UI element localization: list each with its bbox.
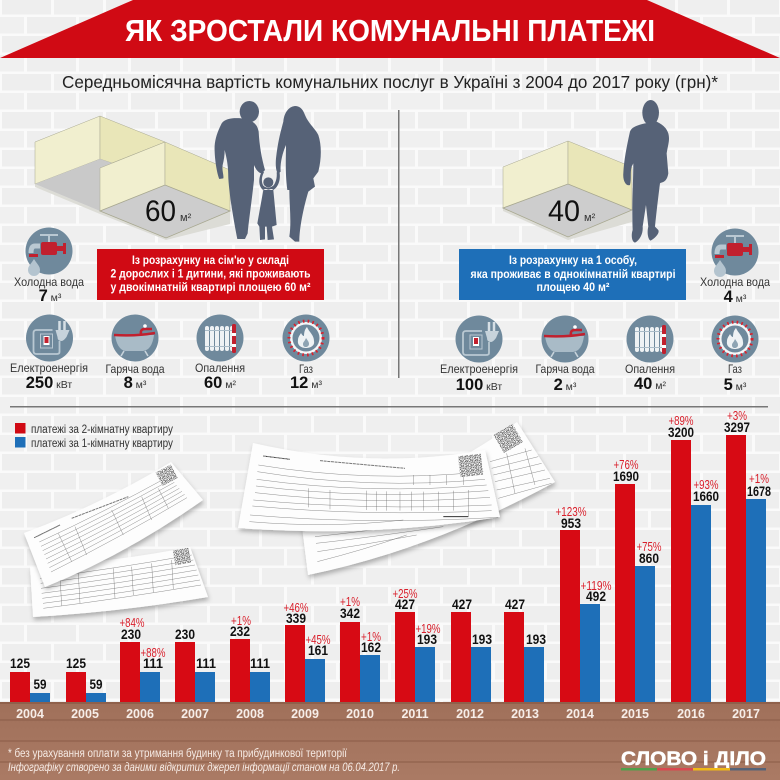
callout: family bbox=[97, 249, 324, 300]
bar chart bbox=[10, 409, 771, 702]
year axis labels: 2016 bbox=[677, 707, 705, 721]
panel: one-room apartment bbox=[440, 100, 770, 394]
2004: 125 bbox=[10, 656, 30, 671]
2016: 3200 bbox=[668, 425, 694, 440]
icon: hot water 2: 2 м³ bbox=[554, 376, 577, 394]
illustration: utility bills, left pair bbox=[24, 462, 208, 617]
icon: cold water 4: 4 м³ bbox=[724, 288, 747, 306]
2014: +123% bbox=[556, 505, 586, 519]
2008: 232 bbox=[230, 624, 250, 639]
2014: +119% bbox=[580, 579, 612, 593]
icon: heating 60 bbox=[195, 314, 245, 392]
2010: 342 bbox=[340, 606, 360, 621]
2012 bbox=[451, 597, 492, 702]
apartment plan 60 m2: м² bbox=[180, 212, 192, 224]
panel: two-room apartment bbox=[10, 101, 330, 392]
2009: +45% bbox=[306, 633, 330, 647]
2008 bbox=[230, 614, 270, 702]
2006: 111 bbox=[143, 656, 163, 671]
icon: hot water 2 bbox=[536, 316, 595, 394]
legend: платежі за 1-кімнатну квартиру bbox=[31, 438, 173, 450]
icon: hot water 8: 8 м³ bbox=[124, 374, 147, 392]
2014: 953 bbox=[561, 516, 581, 531]
2008: 111 bbox=[250, 656, 270, 671]
year axis labels: 2007 bbox=[181, 707, 209, 721]
icon: electricity 250: 250 кВт bbox=[26, 374, 72, 392]
icon: heating 60: Опалення bbox=[195, 361, 245, 375]
footnotes: Інфографіку створено за даними відкритих джерел інформації станом на 06.04.2017 р. bbox=[8, 762, 400, 774]
2017: 1678 bbox=[747, 484, 771, 499]
icon: gas 5: Газ bbox=[728, 362, 742, 376]
apartment plan 60 m2: 60 bbox=[145, 195, 176, 228]
2014 bbox=[556, 505, 612, 702]
2006: +88% bbox=[140, 646, 166, 660]
footnotes bbox=[8, 748, 400, 774]
apartment plan 60 m2 bbox=[35, 116, 230, 240]
callout: single person bbox=[459, 249, 686, 300]
2016: 1660 bbox=[693, 489, 719, 504]
roof banner with title bbox=[0, 0, 780, 58]
icon: gas 5 bbox=[712, 316, 758, 394]
year axis labels: 2017 bbox=[732, 707, 760, 721]
2011: +25% bbox=[392, 587, 418, 601]
2009: 339 bbox=[286, 611, 306, 626]
2010: 162 bbox=[361, 640, 381, 655]
2012: 427 bbox=[452, 597, 472, 612]
person silhouette bbox=[623, 100, 669, 243]
legend: платежі за 2-кімнатну квартиру bbox=[31, 424, 173, 436]
2006 bbox=[120, 616, 166, 702]
2005: 59 bbox=[90, 677, 102, 692]
2006: +84% bbox=[120, 616, 144, 630]
icon: electricity 100: 100 кВт bbox=[456, 376, 502, 394]
year axis labels bbox=[16, 707, 760, 721]
2007 bbox=[175, 627, 216, 702]
icon: heating 40: 40 м² bbox=[634, 375, 666, 393]
year axis labels: 2010 bbox=[346, 707, 374, 721]
2007: 230 bbox=[175, 627, 195, 642]
roof banner with title: ЯК ЗРОСТАЛИ КОМУНАЛЬНІ ПЛАТЕЖІ bbox=[125, 13, 655, 48]
2010: +1% bbox=[340, 595, 360, 609]
2016: +93% bbox=[694, 478, 718, 492]
callout: family: у двокімнатній квартирі площею 60 м² bbox=[110, 280, 310, 294]
2017 bbox=[724, 409, 771, 702]
legend bbox=[15, 423, 173, 450]
icon: hot water 2: Гаряча вода bbox=[536, 362, 595, 376]
2007: 111 bbox=[196, 656, 216, 671]
2004 bbox=[10, 656, 50, 702]
icon: electricity 250: Електроенергія bbox=[10, 361, 88, 375]
icon: cold water 7: 7 м³ bbox=[39, 287, 62, 305]
callout: family: 2 дорослих і 1 дитини, які проживають bbox=[110, 266, 310, 280]
2015 bbox=[613, 458, 662, 702]
2005: 125 bbox=[66, 656, 86, 671]
wooden floor bbox=[0, 702, 780, 780]
logo: Слово і Діло: СЛОВО і ДІЛО bbox=[621, 749, 766, 770]
horizontal divider bbox=[10, 406, 768, 408]
2011: 193 bbox=[417, 632, 437, 647]
icon: hot water 8 bbox=[106, 314, 165, 392]
2013: 427 bbox=[505, 597, 525, 612]
apartment plan 40 m2 bbox=[503, 141, 632, 240]
2017: +3% bbox=[727, 409, 747, 423]
callout: family: Із розрахунку на сім'ю у складі bbox=[132, 253, 289, 267]
2015: 860 bbox=[639, 551, 659, 566]
icon: gas 12 bbox=[282, 314, 330, 392]
2009: +46% bbox=[284, 601, 308, 615]
2010: +1% bbox=[361, 630, 381, 644]
apartment plan 40 m2: 40 bbox=[548, 195, 580, 228]
year axis labels: 2012 bbox=[456, 707, 484, 721]
icon: gas 12: Газ bbox=[299, 362, 313, 376]
subtitle: Середньомісячна вартість комунальних послуг в Україні з 2004 до 2017 року (грн)* bbox=[62, 72, 718, 92]
icon: cold water 4: Холодна вода bbox=[700, 275, 770, 289]
year axis labels: 2014 bbox=[566, 707, 594, 721]
2015: 1690 bbox=[613, 469, 639, 484]
year axis labels: 2006 bbox=[126, 707, 154, 721]
2005 bbox=[66, 656, 106, 702]
icon: heating 60: 60 м² bbox=[204, 374, 236, 392]
2011: 427 bbox=[395, 597, 415, 612]
2013: 193 bbox=[526, 632, 546, 647]
icon: heating 40 bbox=[625, 316, 675, 393]
2017: 3297 bbox=[724, 420, 750, 435]
icon: heating 40: Опалення bbox=[625, 362, 675, 376]
year axis labels: 2004 bbox=[16, 707, 44, 721]
2008: +1% bbox=[231, 614, 251, 628]
icon: cold water 4 bbox=[700, 228, 770, 306]
2015: +75% bbox=[636, 540, 662, 554]
year axis labels: 2013 bbox=[511, 707, 539, 721]
2014: 492 bbox=[586, 589, 606, 604]
icon: hot water 8: Гаряча вода bbox=[106, 362, 165, 376]
icon: gas 12: 12 м³ bbox=[290, 374, 322, 392]
2012: 193 bbox=[472, 632, 492, 647]
icon: cold water 7 bbox=[14, 228, 84, 305]
year axis labels: 2015 bbox=[621, 707, 649, 721]
year axis labels: 2011 bbox=[401, 707, 429, 721]
2009: 161 bbox=[308, 643, 328, 658]
2006: 230 bbox=[121, 627, 141, 642]
2016 bbox=[668, 414, 719, 702]
2015: +76% bbox=[614, 458, 638, 472]
2016: +89% bbox=[668, 414, 694, 428]
vertical divider bbox=[398, 110, 400, 378]
icon: gas 5: 5 м³ bbox=[724, 376, 747, 394]
illustration: utility bills, right pair bbox=[238, 422, 555, 575]
icon: cold water 7: Холодна вода bbox=[14, 275, 84, 289]
2011: +19% bbox=[416, 622, 440, 636]
apartment plan 40 m2: м² bbox=[584, 212, 596, 224]
2017: +1% bbox=[749, 472, 769, 486]
callout: single person: площею 40 м² bbox=[536, 280, 610, 294]
callout: single person: яка проживає в однокімнатній квартирі bbox=[470, 267, 676, 281]
year axis labels: 2008 bbox=[236, 707, 264, 721]
year axis labels: 2009 bbox=[291, 707, 319, 721]
2004: 59 bbox=[34, 677, 46, 692]
2010 bbox=[340, 595, 381, 702]
2011 bbox=[392, 587, 440, 702]
icon: electricity 100: Електроенергія bbox=[440, 362, 518, 376]
footnotes: * без урахування оплати за утримання будинку та прибудинкової території bbox=[8, 748, 348, 760]
2009 bbox=[284, 601, 330, 702]
callout: single person: Із розрахунку на 1 особу, bbox=[509, 253, 637, 267]
family silhouette bbox=[215, 101, 321, 242]
2013 bbox=[504, 597, 546, 702]
icon: electricity 100 bbox=[440, 316, 518, 394]
year axis labels: 2005 bbox=[71, 707, 99, 721]
icon: electricity 250 bbox=[10, 314, 88, 392]
